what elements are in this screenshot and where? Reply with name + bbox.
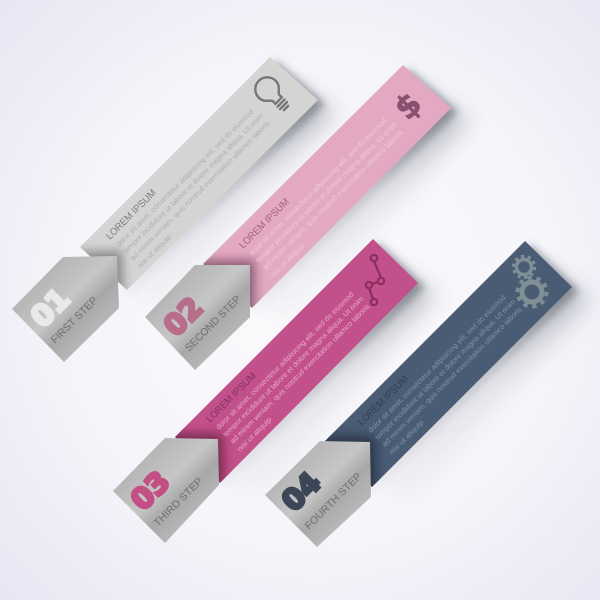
fold shadow: third step xyxy=(175,428,230,483)
panel: third step xyxy=(113,239,436,543)
body: first step: tempor incididunt ut labore et dolore magna aliqua. Ut enim xyxy=(121,111,265,255)
card shadow: second step xyxy=(250,68,469,318)
number 01: 01 xyxy=(24,281,76,334)
panel: first step xyxy=(12,57,336,362)
strip: third step xyxy=(175,239,418,483)
text block: first step xyxy=(104,107,272,270)
fold shadow: fourth step xyxy=(325,430,382,487)
heading: fourth step: LOREM IPSUM xyxy=(356,374,411,428)
tag: fourth step xyxy=(265,441,371,547)
tag: second step xyxy=(145,265,250,370)
body: fourth step: ad minim veniam, quis nostrud exercitation ullamco laboris xyxy=(380,305,524,448)
text block: second step xyxy=(237,116,405,279)
body: second step: dolor sit amet, consectetur adipisicing elit, sed do eiusmod xyxy=(247,116,388,257)
body: third step: tempor incididunt ut labore et dolore magna aliqua. Ut enim xyxy=(221,294,365,438)
fold shadow: first step xyxy=(80,245,130,290)
number 02: 02 xyxy=(157,290,209,343)
body: first step: dolor sit amet, consectetur adipisicing elit, sed do eiusmod xyxy=(114,107,255,248)
card shadow: fourth step xyxy=(370,244,590,497)
large gear xyxy=(518,278,546,306)
body: fourth step: nisi ut aliquip xyxy=(387,418,425,456)
heading: third step: LOREM IPSUM xyxy=(204,371,259,425)
number 03: 03 xyxy=(124,464,176,517)
body: third step: dolor sit amet, consectetur adipisicing elit, sed do eiusmod xyxy=(214,290,355,431)
strip: first step xyxy=(80,57,318,290)
heading: second step: LOREM IPSUM xyxy=(237,197,292,251)
label: fourth step: FOURTH STEP xyxy=(303,471,364,532)
body: third step: ad minim veniam, quis nostrud exercitation ullamco laboris xyxy=(228,302,372,445)
icon: light bulb xyxy=(250,72,295,117)
label: third step: THIRD STEP xyxy=(152,475,205,529)
card shadow: third step xyxy=(218,242,436,493)
body: first step: nisi ut aliquip xyxy=(135,232,173,270)
small gear xyxy=(514,256,534,278)
label: second step: SECOND STEP xyxy=(183,293,243,354)
body: second step: nisi ut aliquip xyxy=(268,241,306,279)
body: second step: ad minim veniam, quis nostrud exercitation ullamco laboris xyxy=(261,128,405,271)
body: third step: nisi ut aliquip xyxy=(235,415,273,453)
tag: first step xyxy=(12,256,119,362)
strip: second step xyxy=(203,65,451,308)
strip: fourth step xyxy=(325,241,572,487)
icon: line chart xyxy=(366,255,384,305)
heading: first step: LOREM IPSUM xyxy=(104,188,159,242)
text block: third step xyxy=(204,290,372,453)
card shadow: first step xyxy=(120,60,336,300)
panel: second step xyxy=(145,65,469,370)
icon: dollar sign: $ xyxy=(387,85,429,127)
icon: gears xyxy=(514,256,546,306)
body: first step: ad minim veniam, quis nostrud exercitation ullamco laboris xyxy=(128,119,272,262)
label: first step: FIRST STEP xyxy=(49,295,100,346)
body: second step: tempor incididunt ut labore et dolore magna aliqua. Ut enim xyxy=(254,120,398,264)
body: fourth step: tempor incididunt ut labore et dolore magna aliqua. Ut enim xyxy=(373,297,517,441)
number 04: 04 xyxy=(275,465,327,518)
text block: fourth step xyxy=(356,293,524,456)
body: fourth step: dolor sit amet, consectetur adipisicing elit, sed do eiusmod xyxy=(366,293,507,434)
tag: third step xyxy=(113,438,219,543)
fold shadow: second step xyxy=(203,254,262,308)
panel: fourth step xyxy=(265,241,590,547)
